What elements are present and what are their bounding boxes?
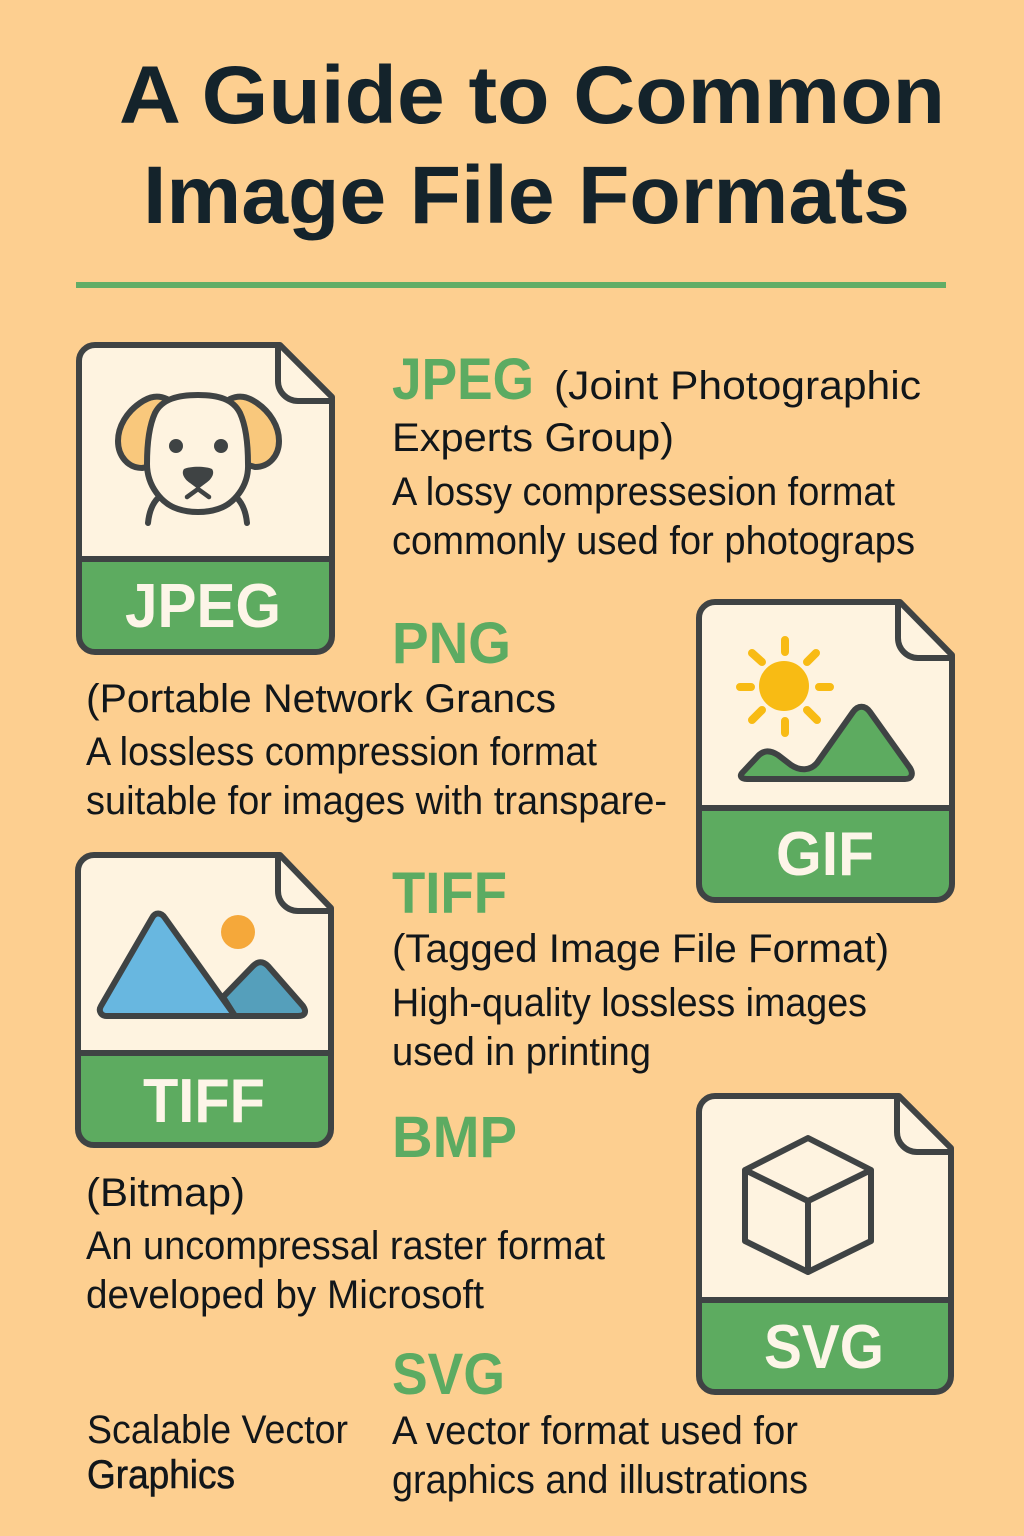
- heading: TIFF: TIFF: [392, 861, 507, 926]
- text: BMP description: An uncompressal raster format: [86, 1224, 605, 1268]
- panel: JPEG description: [392, 347, 921, 563]
- label: JPEG: JPEG: [125, 572, 281, 641]
- text: PNG description: [86, 730, 667, 823]
- text: SVG full name: Scalable Vector: [87, 1408, 348, 1452]
- panel: SVG description: [87, 1342, 808, 1502]
- text: BMP description: developed by Microsoft: [86, 1273, 484, 1317]
- icon: mountain landscape: [741, 707, 912, 779]
- icon: sun: [740, 640, 830, 733]
- title: A Guide to Common: [119, 50, 945, 141]
- panel: GIF file icon: [699, 602, 952, 900]
- text: JPEG description: [392, 470, 915, 563]
- text: JPEG full name: (Joint Photographic: [554, 364, 921, 408]
- label: GIF: GIF: [776, 820, 874, 889]
- text: BMP description: [86, 1224, 605, 1317]
- text: JPEG full name: [392, 364, 921, 460]
- text: SVG full name: Graphics: [87, 1453, 235, 1497]
- icon: cube: [745, 1138, 871, 1272]
- text: TIFF description: High-quality lossless images: [392, 981, 867, 1025]
- text: TIFF full name: (Tagged Image File Format): [392, 927, 889, 971]
- label: TIFF: TIFF: [143, 1067, 265, 1136]
- icon: mountains and sun: [100, 914, 305, 1016]
- text: BMP full name: (Bitmap): [86, 1171, 245, 1215]
- text: SVG description: A vector format used for: [392, 1409, 798, 1453]
- panel: BMP description: [86, 1105, 605, 1317]
- panel: TIFF file icon: [78, 855, 331, 1145]
- panel: SVG file icon: [699, 1096, 951, 1392]
- panel: PNG description: [86, 611, 667, 823]
- heading: PNG: PNG: [392, 611, 511, 676]
- heading: BMP: BMP: [392, 1105, 517, 1170]
- text: SVG description: [392, 1409, 808, 1502]
- text: JPEG full name: Experts Group): [392, 416, 674, 460]
- text: PNG full name: (Portable Network Grancs: [86, 677, 556, 721]
- text: PNG description: A lossless compression format: [86, 730, 597, 774]
- title: Image File Formats: [143, 150, 910, 241]
- text: SVG description: graphics and illustrations: [392, 1458, 808, 1502]
- heading: JPEG: JPEG: [392, 347, 534, 412]
- text: TIFF description: [392, 981, 867, 1074]
- panel: JPEG file icon: [79, 345, 332, 652]
- panel: TIFF description: [392, 861, 889, 1074]
- text: PNG description: suitable for images with transpare-: [86, 779, 667, 823]
- text: TIFF description: used in printing: [392, 1030, 651, 1074]
- text: JPEG description: commonly used for photograps: [392, 519, 915, 563]
- text: JPEG description: A lossy compressesion format: [392, 470, 895, 514]
- label: SVG: SVG: [764, 1313, 884, 1382]
- heading: SVG: SVG: [392, 1342, 505, 1407]
- icon: dog face: [118, 395, 279, 523]
- text: SVG full name: [87, 1408, 348, 1497]
- title: [119, 50, 945, 241]
